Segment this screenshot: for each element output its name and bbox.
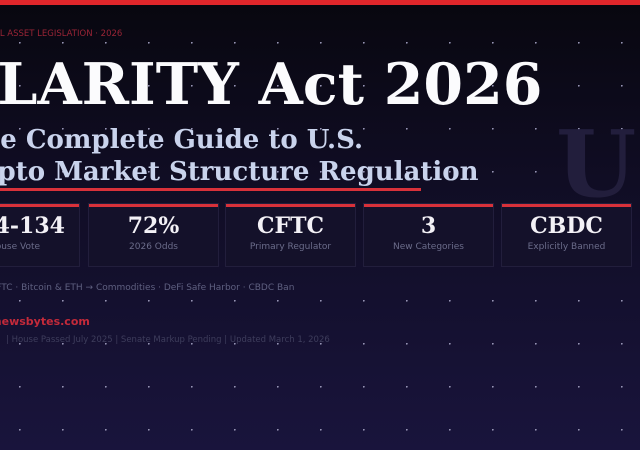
card: odds: 72% (128, 213, 179, 239)
top red bar (0, 0, 640, 5)
card: regulator: Primary Regulator (250, 242, 331, 252)
card: categories: 3 (421, 213, 436, 239)
card: categories: New Categories (393, 242, 464, 252)
card: CBDC (501, 203, 632, 267)
underline (0, 188, 421, 191)
card: vote (0, 203, 80, 267)
card: categories (363, 203, 494, 267)
card: regulator: CFTC (257, 213, 324, 239)
stat cards (0, 203, 632, 267)
meta: | House Passed July 2025 | Senate Markup Pending | Updated March 1, 2026 (6, 335, 330, 345)
card: regulator (225, 203, 356, 267)
card: CBDC: CBDC (530, 213, 603, 239)
card: CBDC: Explicitly Banned (528, 242, 605, 252)
watermark U: U (556, 110, 636, 218)
card: odds (88, 203, 219, 267)
card: odds: 2026 Odds (129, 242, 178, 252)
subtitle (0, 125, 479, 187)
